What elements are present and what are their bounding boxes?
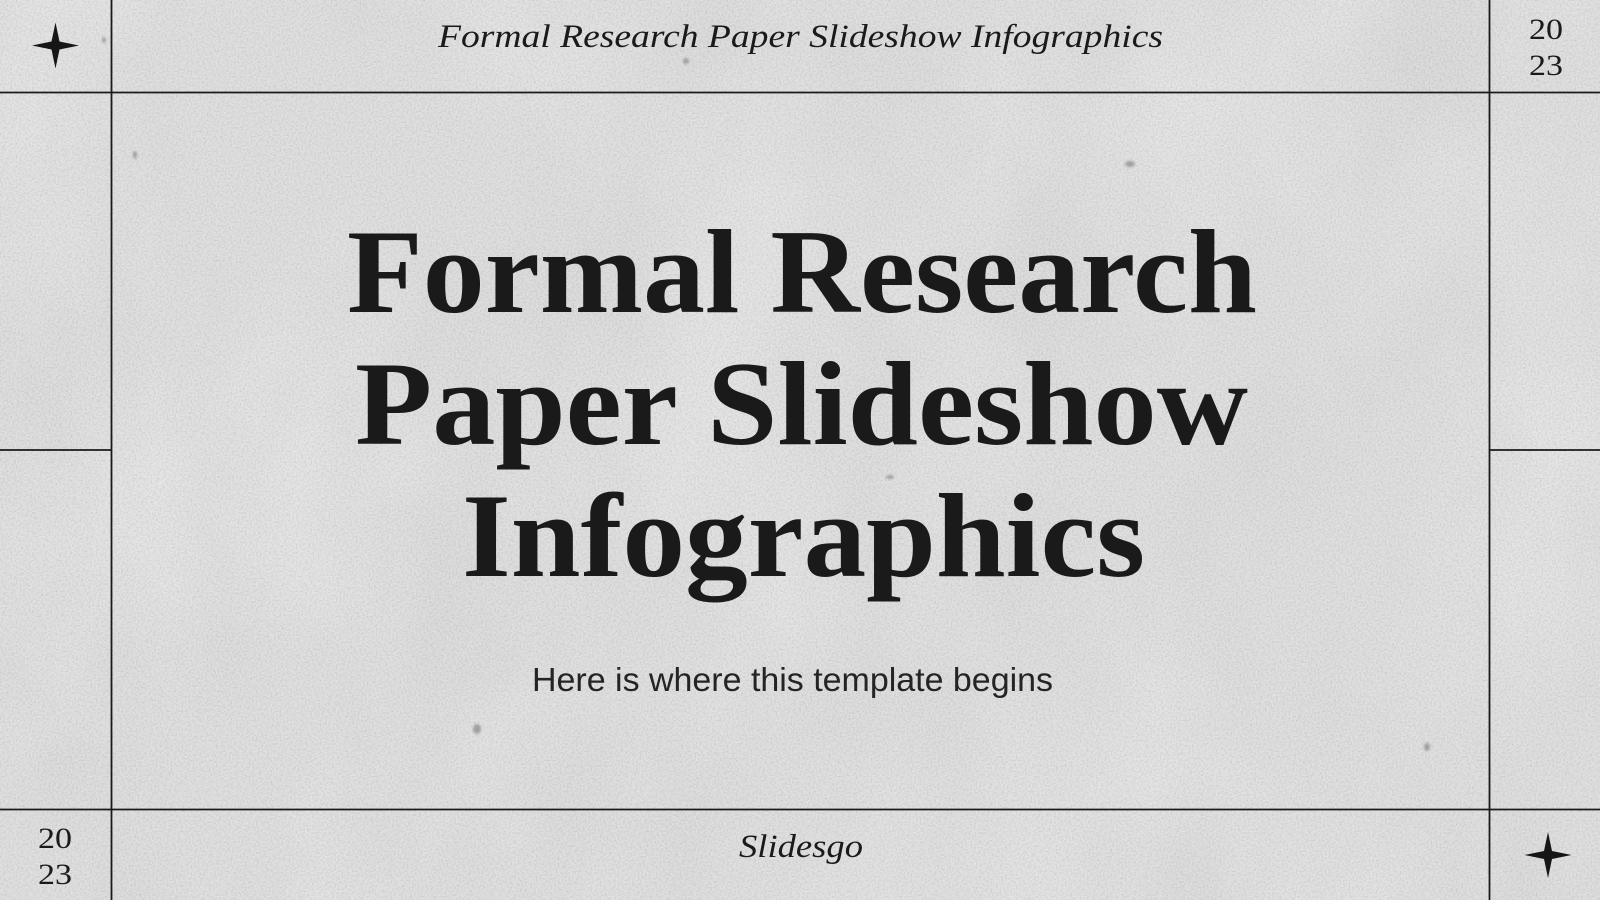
year bottom left	[38, 822, 72, 891]
icon: four-point star bottom right	[1524, 832, 1572, 878]
title	[347, 205, 1257, 603]
subtitle: Here is where this template begins	[532, 661, 1053, 698]
header text: Formal Research Paper Slideshow Infographics	[437, 19, 1163, 55]
year top right: 20	[1529, 13, 1563, 46]
title: Infographics	[462, 469, 1145, 603]
title: Paper Slideshow	[355, 337, 1248, 470]
year top right	[1529, 13, 1563, 82]
footer text: Slidesgo	[739, 829, 863, 865]
year top right: 23	[1529, 49, 1563, 82]
year bottom left: 20	[38, 822, 72, 855]
year bottom left: 23	[38, 858, 72, 891]
title: Formal Research	[347, 205, 1257, 338]
icon: four-point star top left	[32, 22, 79, 68]
